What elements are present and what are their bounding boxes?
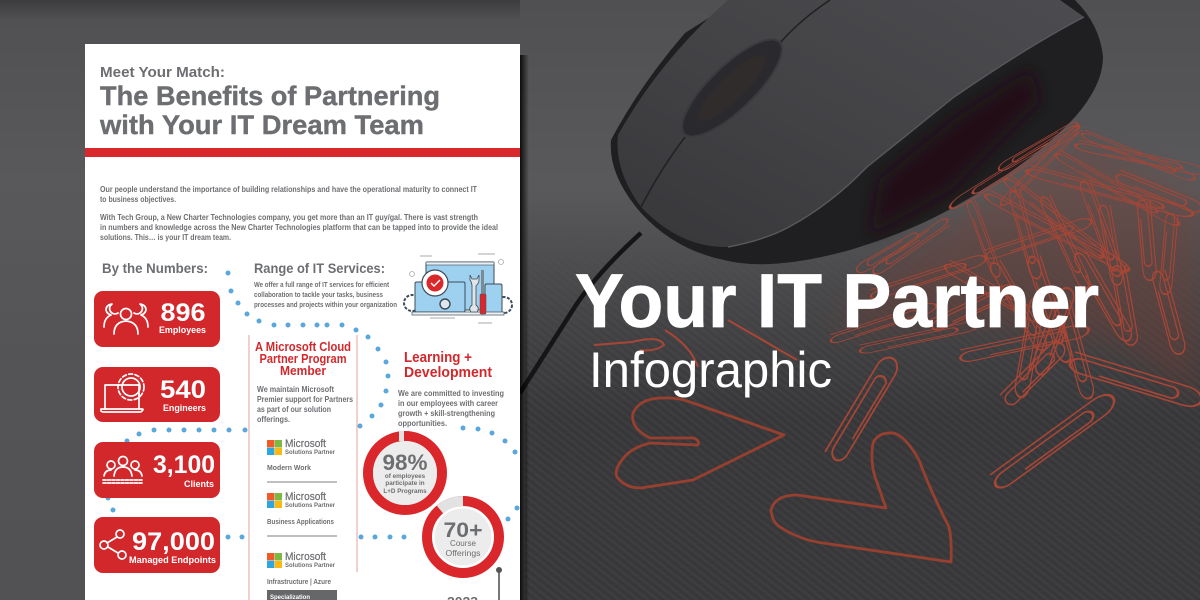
stat label: Engineers [163, 403, 206, 414]
donut: 70 plus courses: 70+ [444, 519, 482, 542]
donut: 70 plus courses [427, 501, 499, 573]
infographic sheet [85, 44, 520, 600]
mouse top surface [617, 0, 1084, 247]
column rule left [248, 335, 250, 600]
sheet shadow [520, 55, 529, 600]
learning text: in our employees with career [398, 399, 498, 408]
heading: microsoft partner: Member [280, 364, 326, 378]
icon: clients with stars [103, 456, 143, 483]
learning text: growth + skill-strengthening [398, 409, 495, 418]
sheet eyebrow: Meet Your Match: [100, 64, 225, 81]
stat card: managed endpoints [94, 517, 220, 573]
microsoft logo [267, 440, 282, 455]
donut: 70 plus courses: Offerings [446, 549, 480, 558]
stat label: Clients [184, 479, 214, 490]
heading: learning and development [404, 350, 492, 381]
heading: range of IT services: Range of IT Services: [254, 260, 385, 276]
partner badge: infrastructure azure: Infrastructure | Azure [267, 577, 331, 586]
stat card: employees [94, 291, 220, 347]
intro text: in numbers and knowledge across the New Charter Technologies platform that can be tapped into to provide the ideal [100, 223, 498, 232]
services text: collaboration to tackle your tasks, business [254, 290, 383, 299]
icon: share nodes [100, 530, 126, 559]
heading: microsoft partner [255, 340, 351, 378]
stat label: Managed Endpoints [129, 555, 216, 566]
dotted path [106, 270, 520, 540]
intro text: to business objectives. [100, 195, 176, 204]
mouse scroll wheel [669, 26, 795, 150]
stat card: clients [94, 442, 220, 498]
partner badge: business applications: Business Applications [267, 517, 334, 526]
partner badge: modern work: Microsoft [285, 438, 326, 450]
partner badge: business applications: Solutions Partner [285, 502, 335, 509]
microsoft logo [267, 493, 282, 508]
stat card: engineers [94, 367, 220, 422]
icon: laptop with gear [101, 374, 144, 412]
donut: 98 percent [368, 431, 442, 510]
partner badge: business applications [267, 491, 337, 536]
partner badge: modern work: Solutions Partner [285, 449, 335, 456]
sheet title: with Your IT Dream Team [99, 110, 424, 140]
intro text: With Tech Group, a New Charter Technologies company, you get more than an IT guy/gal. There is vast strength [100, 213, 478, 222]
services text: We offer a full range of IT services for efficient [254, 280, 389, 289]
stat label: Employees [159, 325, 206, 336]
microsoft text: as part of our solution [257, 405, 331, 414]
mouse body [611, 0, 1103, 264]
donut: 98 percent: of employees [385, 473, 426, 480]
heart paperclip small [616, 398, 784, 488]
microsoft text: Premier support for Partners [257, 395, 353, 404]
mouse seam [641, 0, 830, 207]
stat value: 3,100 [153, 451, 215, 479]
partner badge: infrastructure azure: Microsoft [285, 551, 326, 563]
red divider bar [85, 148, 520, 157]
microsoft text: We maintain Microsoft [257, 385, 334, 394]
timeline marker [447, 567, 502, 600]
heading: learning and development: Learning + [404, 350, 472, 366]
microsoft logo [267, 553, 282, 568]
services text [254, 280, 397, 309]
stat value: 896 [160, 299, 206, 327]
donut: 98 percent: participate in [385, 480, 425, 487]
heading: microsoft partner: A Microsoft Cloud [255, 340, 351, 354]
intro text [100, 185, 498, 242]
computer mouse photo [520, 0, 1103, 393]
partner badge: modern work: Modern Work [267, 463, 312, 472]
intro text: solutions. This… is your IT dream team. [100, 233, 231, 242]
microsoft text [257, 385, 353, 424]
heart paperclip large [771, 433, 951, 562]
illustration: IT tools and devices [404, 254, 512, 323]
mouse lower dark side [870, 70, 1040, 235]
donut: 98 percent: 98% [382, 450, 428, 475]
column rule right [356, 335, 358, 572]
banner title: Your IT Partner [575, 259, 1099, 344]
mouse cable [520, 233, 641, 393]
sheet title [99, 81, 440, 140]
stat value: 540 [160, 376, 206, 404]
intro text: Our people understand the importance of building relationships and have the operational maturity to connect IT [100, 185, 477, 194]
heading: microsoft partner: Partner Program [260, 352, 346, 366]
partner badge: infrastructure azure: Solutions Partner [285, 562, 335, 569]
partner badge: modern work [267, 438, 337, 482]
heading: by the numbers: By the Numbers: [102, 260, 208, 276]
services text: processes and projects within your organization [254, 300, 397, 309]
learning text [398, 389, 504, 428]
microsoft text: offerings. [257, 415, 290, 424]
sheet title: The Benefits of Partnering [100, 81, 440, 111]
partner badge: business applications: Microsoft [285, 491, 326, 503]
learning text: We are committed to investing [398, 389, 504, 398]
pile tone [830, 140, 1200, 400]
icon: people [104, 304, 148, 334]
learning text: opportunities. [398, 419, 447, 428]
mouse ridge highlight [728, 17, 1084, 247]
donut: 70 plus courses: Course [450, 539, 477, 548]
banner subtitle: Infographic [589, 342, 832, 398]
heading: learning and development: Development [404, 365, 492, 381]
donut: 98 percent: L+D Programs [383, 488, 427, 495]
stat value: 97,000 [132, 528, 215, 556]
paperclip pile [594, 120, 1200, 491]
hidden heart paperclip behind title [594, 320, 797, 367]
partner badge: infrastructure azure [267, 551, 337, 600]
